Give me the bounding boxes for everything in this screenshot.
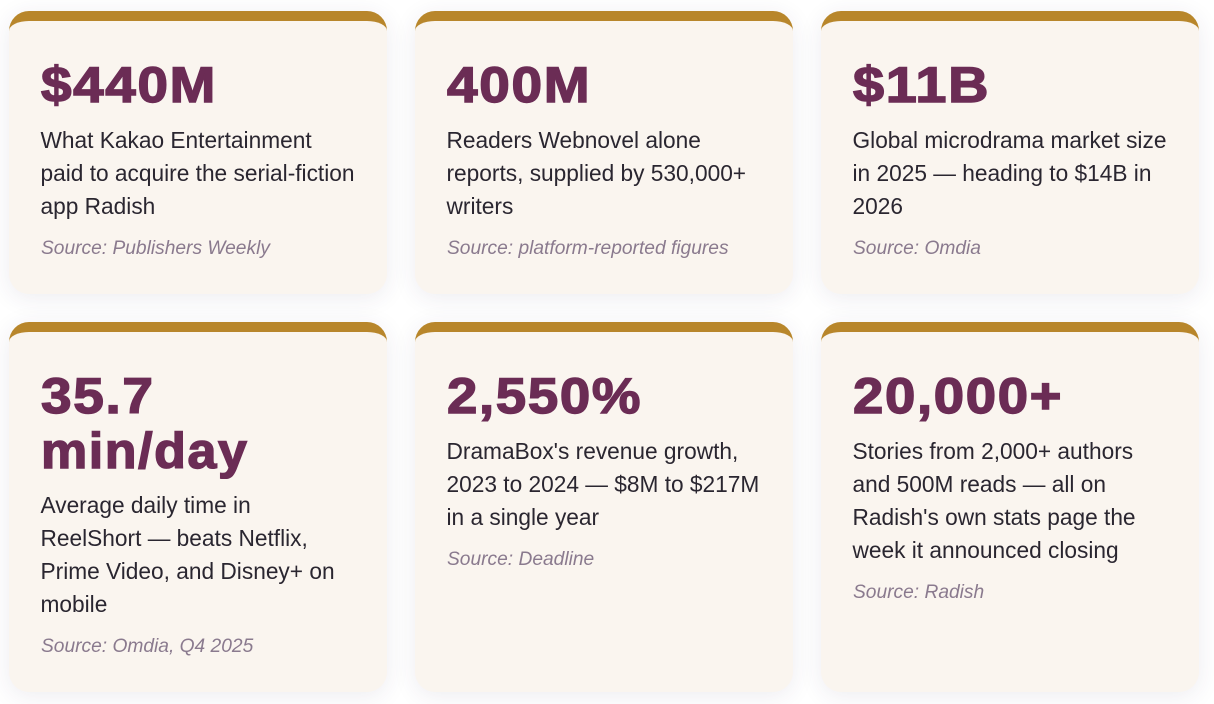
stat: 35.7 min/day: 35.7 xyxy=(41,368,155,424)
description xyxy=(40,127,355,219)
stat: 35.7 min/day xyxy=(41,368,248,479)
source: Source: platform-reported figures xyxy=(447,238,729,259)
description: mobile xyxy=(40,591,107,617)
description: What Kakao Entertainment xyxy=(40,127,312,153)
description: Global microdrama market size xyxy=(852,127,1166,153)
description: Average daily time in xyxy=(40,492,251,518)
description: 2023 to 2024 — $8M to $217M xyxy=(446,471,759,497)
description xyxy=(40,492,335,617)
panel: ReelShort time stat xyxy=(9,322,387,692)
description: 2026 xyxy=(852,193,903,219)
description: paid to acquire the serial-fiction xyxy=(40,160,355,186)
source: Source: Publishers Weekly xyxy=(41,238,270,259)
panel: Kakao acquisition stat xyxy=(9,11,387,294)
description: reports, supplied by 530,000+ xyxy=(446,160,746,186)
description: ReelShort — beats Netflix, xyxy=(40,525,308,551)
description xyxy=(446,438,759,530)
panel: Webnovel readers stat xyxy=(415,11,793,294)
panel: microdrama market stat xyxy=(821,11,1199,294)
source: Source: Omdia, Q4 2025 xyxy=(41,636,253,657)
description: in 2025 — heading to $14B in xyxy=(852,160,1151,186)
stat: 400M: 400M xyxy=(447,56,591,112)
description: writers xyxy=(446,193,513,219)
description: and 500M reads — all on xyxy=(852,471,1106,497)
stat: 2,550%: 2,550% xyxy=(447,368,642,424)
description xyxy=(852,438,1136,563)
description: DramaBox's revenue growth, xyxy=(446,438,738,464)
stat: $440M: $440M xyxy=(41,56,217,112)
description: Stories from 2,000+ authors xyxy=(852,438,1133,464)
description: app Radish xyxy=(40,193,155,219)
source: Source: Omdia xyxy=(853,238,981,259)
description xyxy=(446,127,746,219)
source: Source: Radish xyxy=(853,582,984,603)
stat: $11B: $11B xyxy=(853,56,990,112)
panel: DramaBox growth stat xyxy=(415,322,793,692)
stat: 35.7 min/day: min/day xyxy=(41,422,248,478)
description: Radish's own stats page the xyxy=(852,504,1136,530)
description: Prime Video, and Disney+ on xyxy=(40,558,335,584)
description: Readers Webnovel alone xyxy=(446,127,701,153)
panel: Radish stories stat xyxy=(821,322,1199,692)
description: week it announced closing xyxy=(852,537,1119,563)
description xyxy=(852,127,1166,219)
stat: 20,000+: 20,000+ xyxy=(853,368,1063,424)
description: in a single year xyxy=(446,504,599,530)
source: Source: Deadline xyxy=(447,549,594,570)
